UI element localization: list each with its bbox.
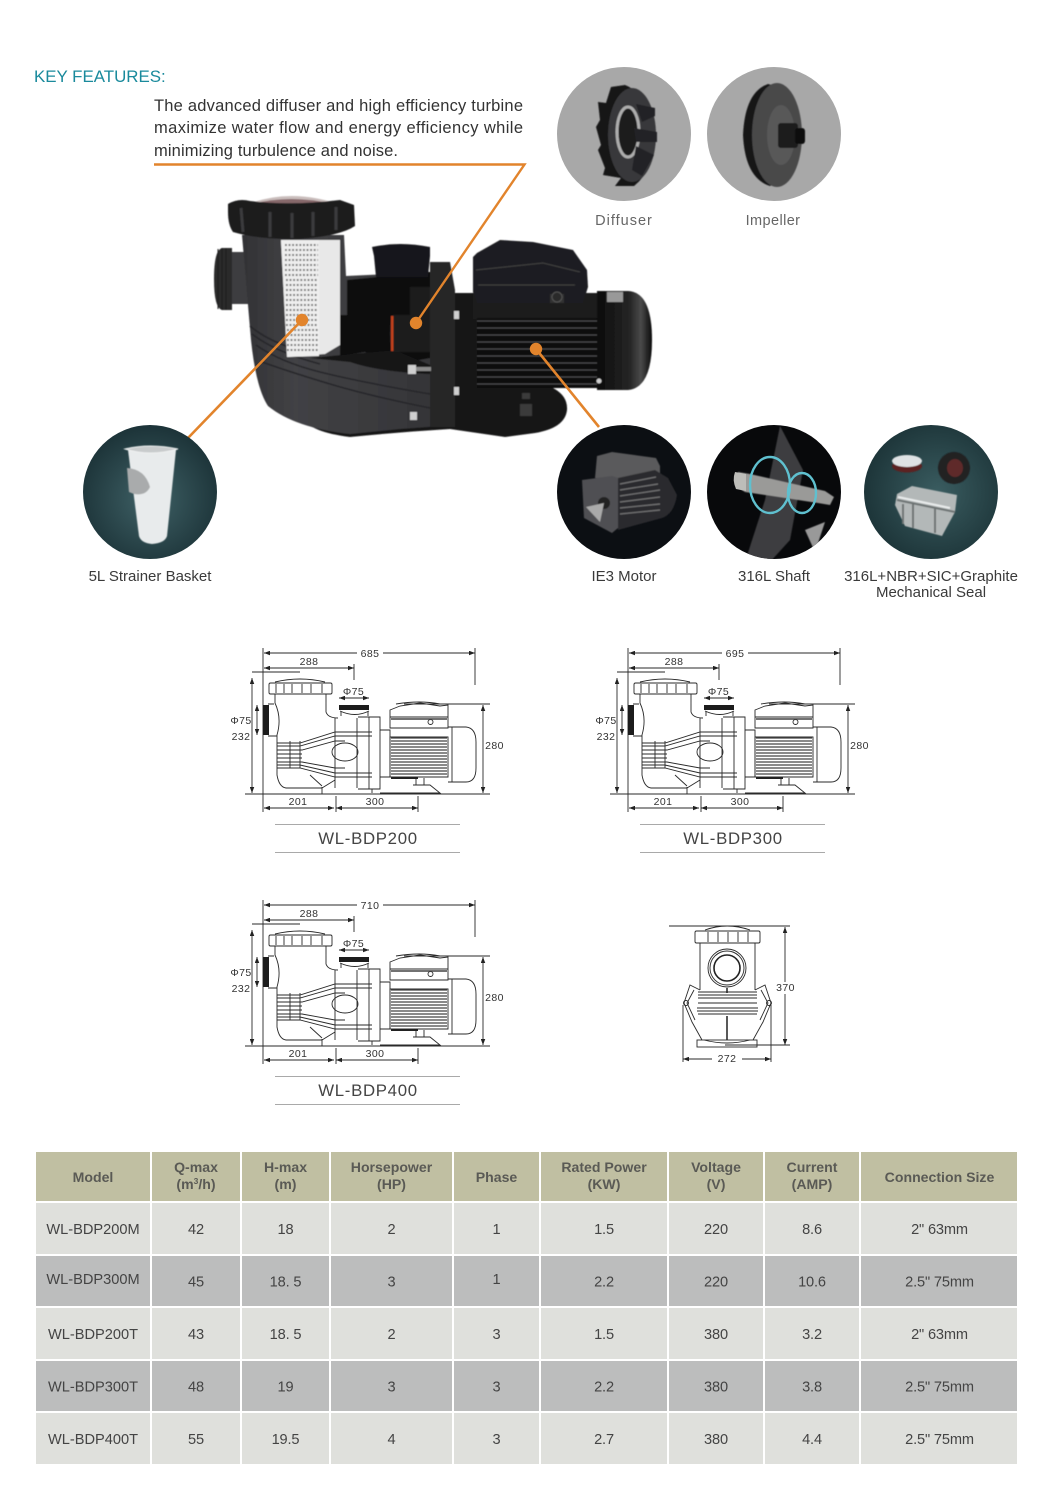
table header: Voltage <box>691 1159 741 1175</box>
row: WL-BDP200M: 1 <box>493 1222 501 1238</box>
motor end cap <box>597 291 652 390</box>
table header: H-max <box>264 1159 307 1175</box>
table header: Q-max <box>174 1159 218 1175</box>
icon: diffuser <box>557 67 691 201</box>
diagram: WL-BDP300: 201 <box>654 796 672 808</box>
diagram: front view <box>669 926 795 1065</box>
foot plate <box>303 388 567 437</box>
text block: feature description <box>154 97 523 160</box>
diagram: WL-BDP200: 280 <box>485 740 504 752</box>
volute flange <box>430 262 455 427</box>
label: mechanical seal: 316L+NBR+SIC+Graphite <box>844 568 1018 585</box>
row: WL-BDP200T: WL-BDP200T <box>48 1327 138 1343</box>
row: WL-BDP400T: 2.7 <box>594 1432 614 1448</box>
label: strainer basket: 5L Strainer Basket <box>89 568 212 585</box>
diagram: WL-BDP400: 201 <box>289 1048 307 1060</box>
row: WL-BDP400T: WL-BDP400T <box>48 1432 138 1448</box>
row: WL-BDP300T: WL-BDP300T <box>48 1380 138 1396</box>
strainer inlet <box>214 248 260 310</box>
table header: (AMP) <box>792 1176 832 1192</box>
row: WL-BDP200M: 18 <box>278 1222 293 1238</box>
diagram: WL-BDP300: 695 <box>726 648 744 660</box>
lower dark swoosh <box>310 350 430 374</box>
diagram: WL-BDP200: 685 <box>361 648 379 660</box>
table header: Current <box>787 1159 838 1175</box>
icon: 316L shaft <box>707 425 841 562</box>
cutaway interior <box>340 272 430 364</box>
table header: (HP) <box>377 1176 406 1192</box>
motor top housing <box>473 293 598 319</box>
bolts <box>408 311 602 420</box>
row: WL-BDP400T: 2.5" 75mm <box>905 1432 974 1448</box>
table header: /h) <box>198 1176 216 1192</box>
strainer basket <box>281 240 340 357</box>
row: WL-BDP300M: 45 <box>188 1274 204 1290</box>
callout line: impeller <box>154 164 524 329</box>
row: WL-BDP400T: 4 <box>388 1432 396 1448</box>
icon: mechanical seal <box>864 425 998 559</box>
row: WL-BDP300T: 2.2 <box>594 1380 614 1396</box>
diagram: WL-BDP200: 201 <box>289 796 307 808</box>
row: WL-BDP300M: 2.2 <box>594 1274 614 1290</box>
row: WL-BDP200M: 8.6 <box>802 1222 822 1238</box>
label: mechanical seal: Mechanical Seal <box>876 584 986 601</box>
label: IE3 motor: IE3 Motor <box>591 568 657 585</box>
row: WL-BDP200T: 18. 5 <box>270 1327 301 1343</box>
row: WL-BDP300M <box>36 1256 1017 1306</box>
row: WL-BDP300T: 19 <box>278 1380 293 1396</box>
row: WL-BDP200T: 2 <box>388 1327 396 1343</box>
icon: impeller <box>707 67 841 201</box>
table header: (m) <box>275 1176 296 1192</box>
diagram: WL-BDP300: 288 <box>665 656 683 668</box>
diagram: WL-BDP300: Φ75 <box>708 686 729 698</box>
row: WL-BDP200T: 43 <box>188 1327 204 1343</box>
row: WL-BDP200M: 2 <box>388 1222 396 1238</box>
row: WL-BDP300T: 3 <box>388 1380 396 1396</box>
row: WL-BDP200M: 220 <box>704 1222 728 1238</box>
diagram: WL-BDP200: 232 <box>232 731 250 743</box>
row: WL-BDP300T: 3.8 <box>802 1380 822 1396</box>
outlet port <box>372 244 430 277</box>
foot blocks <box>520 393 532 416</box>
row: WL-BDP400T: 380 <box>704 1432 728 1448</box>
impeller seal <box>390 287 430 352</box>
row: WL-BDP300M: 10.6 <box>798 1274 826 1290</box>
diagram: front view: 272 <box>718 1053 736 1065</box>
row: WL-BDP300T: 3 <box>493 1380 501 1396</box>
row: WL-BDP300T: 2.5" 75mm <box>905 1380 974 1396</box>
row: WL-BDP300T: 380 <box>704 1380 728 1396</box>
row: WL-BDP200T: 3 <box>493 1327 501 1343</box>
row: WL-BDP400T <box>36 1413 1017 1464</box>
row: WL-BDP300M: 18. 5 <box>270 1274 301 1290</box>
diagram: WL-BDP400: 288 <box>300 908 318 920</box>
row: WL-BDP200M: 2" 63mm <box>911 1222 968 1238</box>
diagram: WL-BDP200: 288 <box>300 656 318 668</box>
rating label <box>607 292 623 302</box>
row: WL-BDP200M: WL-BDP200M <box>46 1222 140 1238</box>
motor fins <box>477 318 598 388</box>
row: WL-BDP300M: WL-BDP300M <box>46 1272 140 1288</box>
table header: Horsepower <box>351 1159 433 1175</box>
diagram: WL-BDP200: 300 <box>366 796 384 808</box>
diagram: WL-BDP200: Φ75 <box>343 686 364 698</box>
diagram: WL-BDP400 <box>230 900 504 1104</box>
diagram: WL-BDP300: 232 <box>597 731 615 743</box>
diagram: WL-BDP400: 232 <box>232 983 250 995</box>
diagram: WL-BDP300: 300 <box>731 796 749 808</box>
diagram: WL-BDP300 <box>595 648 869 852</box>
row: WL-BDP200M: 42 <box>188 1222 204 1238</box>
row: WL-BDP300M: 1 <box>493 1272 501 1288</box>
row: WL-BDP300T <box>36 1361 1017 1411</box>
motor neck <box>455 293 479 388</box>
row: WL-BDP400T: 4.4 <box>802 1432 822 1448</box>
table header: (KW) <box>588 1176 620 1192</box>
diagram: WL-BDP400: Φ75 <box>230 967 252 979</box>
diagram: WL-BDP300: 280 <box>850 740 869 752</box>
row: WL-BDP300M: 220 <box>704 1274 728 1290</box>
text block: feature description: maximize water flow and energy efficiency while <box>154 119 523 137</box>
row: WL-BDP200T: 2" 63mm <box>911 1327 968 1343</box>
table header: Phase <box>476 1169 517 1185</box>
row: WL-BDP200T: 3.2 <box>802 1327 822 1343</box>
diagram: WL-BDP400: 710 <box>361 900 379 912</box>
table: specifications <box>36 1152 1017 1464</box>
text block: feature description: minimizing turbulence and noise. <box>154 142 398 160</box>
diagram: WL-BDP400: 300 <box>366 1048 384 1060</box>
diagram: WL-BDP300: Φ75 <box>595 715 617 727</box>
label: impeller: Impeller <box>746 213 800 229</box>
diagram: WL-BDP400: Φ75 <box>343 938 364 950</box>
heading: key features: KEY FEATURES: <box>34 67 166 86</box>
label: diffuser: Diffuser <box>595 213 653 229</box>
diagram: WL-BDP400: WL-BDP400 <box>318 1081 418 1100</box>
row: WL-BDP400T: 3 <box>493 1432 501 1448</box>
text block: feature description: The advanced diffuser and high efficiency turbine <box>154 97 523 115</box>
diagram: WL-BDP200: WL-BDP200 <box>318 829 418 848</box>
table header: Connection Size <box>885 1169 994 1185</box>
table header: (m <box>176 1176 194 1192</box>
row: WL-BDP400T: 55 <box>188 1432 204 1448</box>
row: WL-BDP300T: 48 <box>188 1380 204 1396</box>
terminal box <box>473 240 588 303</box>
table header: Rated Power <box>561 1159 647 1175</box>
label: 316L shaft: 316L Shaft <box>738 568 811 585</box>
table header: (V) <box>707 1176 725 1192</box>
row: WL-BDP300M: 3 <box>388 1274 396 1290</box>
row: WL-BDP200T <box>36 1308 1017 1359</box>
photo: pool pump <box>214 196 652 437</box>
row: WL-BDP300M: 2.5" 75mm <box>905 1274 974 1290</box>
row: WL-BDP200T: 1.5 <box>594 1327 614 1343</box>
pump body <box>242 235 455 434</box>
diagram: WL-BDP300: WL-BDP300 <box>683 829 783 848</box>
icon: IE3 motor <box>557 425 691 559</box>
row: WL-BDP200M: 1.5 <box>594 1222 614 1238</box>
icon: strainer basket <box>83 425 217 559</box>
diagram: WL-BDP200 <box>230 648 504 852</box>
diagram: WL-BDP200: Φ75 <box>230 715 252 727</box>
callout line: motor <box>530 343 599 427</box>
diagram: WL-BDP400: 280 <box>485 992 504 1004</box>
row: WL-BDP200M <box>36 1203 1017 1254</box>
table header: Model <box>73 1169 113 1185</box>
table header <box>36 1152 1017 1201</box>
pump body ribs <box>250 326 430 408</box>
pump lid <box>228 196 355 239</box>
row: WL-BDP200T: 380 <box>704 1327 728 1343</box>
callout line: strainer basket <box>188 314 308 438</box>
table header: 3 <box>194 1176 199 1186</box>
diagram: front view: 370 <box>776 982 795 994</box>
row: WL-BDP400T: 19.5 <box>272 1432 299 1448</box>
